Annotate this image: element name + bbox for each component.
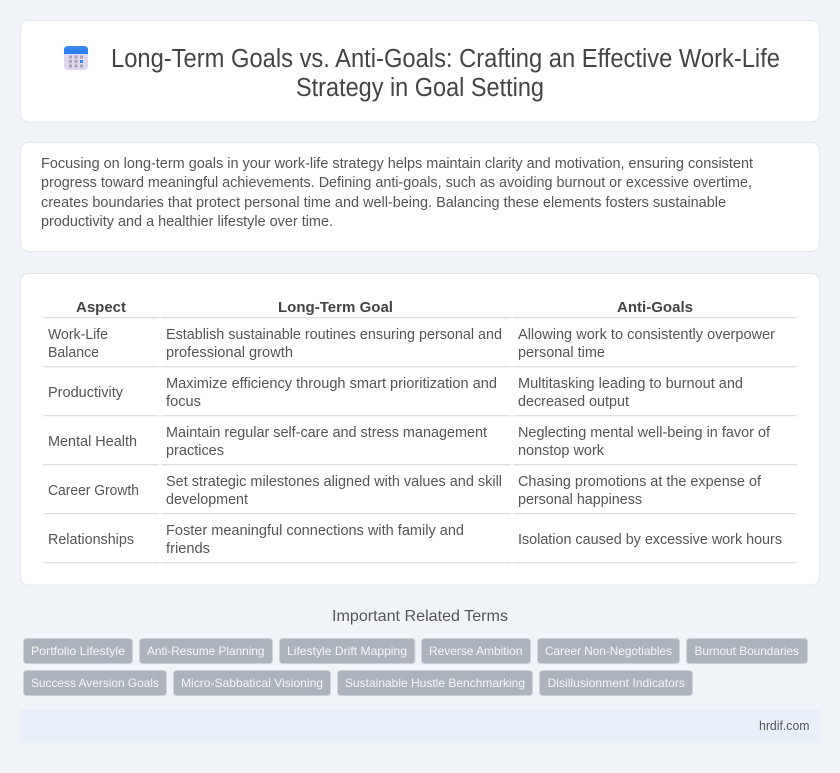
related term tags: Burnout Boundaries: [694, 644, 799, 658]
row: work-life balance: professional growth: [166, 345, 293, 361]
row: work-life balance: Allowing work to consistently overpower: [518, 327, 775, 343]
title: Strategy in Goal Setting: [296, 74, 544, 102]
table header row: [76, 299, 693, 316]
table header row: Long-Term Goal: [278, 299, 393, 316]
intro text: Focusing on long-term goals in your work-life strategy helps maintain clarity and motivation, ensuring consistent: [41, 156, 753, 172]
row: career growth: development: [166, 492, 248, 508]
row: productivity: focus: [166, 394, 201, 410]
footer: [20, 709, 820, 743]
related term tags: Portfolio Lifestyle: [31, 644, 125, 658]
row: career growth: Chasing promotions at the expense of: [518, 474, 762, 490]
intro text: [41, 156, 753, 230]
related term tags: Lifestyle Drift Mapping: [287, 644, 407, 658]
row: mental health: nonstop work: [518, 443, 605, 459]
row: relationships: Relationships: [48, 532, 134, 548]
row: productivity: Maximize efficiency through smart prioritization and: [166, 376, 497, 392]
row: work-life balance: personal time: [518, 345, 605, 361]
icon: calendar: [64, 46, 88, 70]
row: mental health: [48, 425, 771, 459]
footer source: hrdif.com: [759, 718, 810, 733]
row: career growth: personal happiness: [518, 492, 642, 508]
row: productivity: [48, 376, 743, 410]
row: productivity: Productivity: [48, 385, 124, 401]
related term tags: Disillusionment Indicators: [548, 676, 685, 690]
table header row: Anti-Goals: [617, 299, 693, 316]
panel: header: [20, 20, 820, 122]
related term tags: Career Non-Negotiables: [545, 644, 672, 658]
row: productivity: Multitasking leading to burnout and: [518, 376, 743, 392]
row: relationships: friends: [166, 541, 210, 557]
related term tags: Micro-Sabbatical Visioning: [181, 676, 323, 690]
heading: important related terms: Important Related Terms: [332, 608, 508, 625]
row: career growth: [48, 474, 762, 508]
title: [111, 45, 780, 102]
related term tags: Reverse Ambition: [429, 644, 522, 658]
table header row: Aspect: [76, 299, 126, 316]
title: Long-Term Goals vs. Anti-Goals: Crafting an Effective Work-Life: [111, 45, 780, 73]
intro text: creates boundaries that protect personal time and well-being. Balancing these elements fosters sustainable: [41, 195, 726, 211]
row: career growth: Set strategic milestones aligned with values and skill: [166, 474, 502, 490]
panel: comparison table: [20, 274, 820, 585]
row: mental health: Neglecting mental well-being in favor of: [518, 425, 771, 441]
row: work-life balance: Work-Life: [48, 327, 108, 343]
row: relationships: [48, 523, 782, 557]
row: relationships: Foster meaningful connections with family and: [166, 523, 464, 539]
related term tags: Sustainable Hustle Benchmarking: [345, 676, 525, 690]
row: mental health: practices: [166, 443, 224, 459]
row: mental health: Mental Health: [48, 434, 137, 450]
related term tags: [24, 638, 808, 696]
intro text: productivity and a healthier lifestyle over time.: [41, 214, 333, 230]
row: career growth: Career Growth: [48, 483, 139, 499]
row: work-life balance: [48, 327, 775, 361]
related term tags: Success Aversion Goals: [31, 676, 159, 690]
row: work-life balance: Establish sustainable routines ensuring personal and: [166, 327, 502, 343]
row: productivity: decreased output: [518, 394, 629, 410]
row: relationships: Isolation caused by excessive work hours: [518, 532, 782, 548]
intro text: progress toward meaningful achievements. Defining anti-goals, such as avoiding burnout or excessive overtime,: [41, 175, 752, 191]
row: mental health: Maintain regular self-care and stress management: [166, 425, 487, 441]
panel: introduction: [20, 142, 820, 252]
row: work-life balance: Balance: [48, 345, 99, 361]
related term tags: Anti-Resume Planning: [147, 644, 264, 658]
